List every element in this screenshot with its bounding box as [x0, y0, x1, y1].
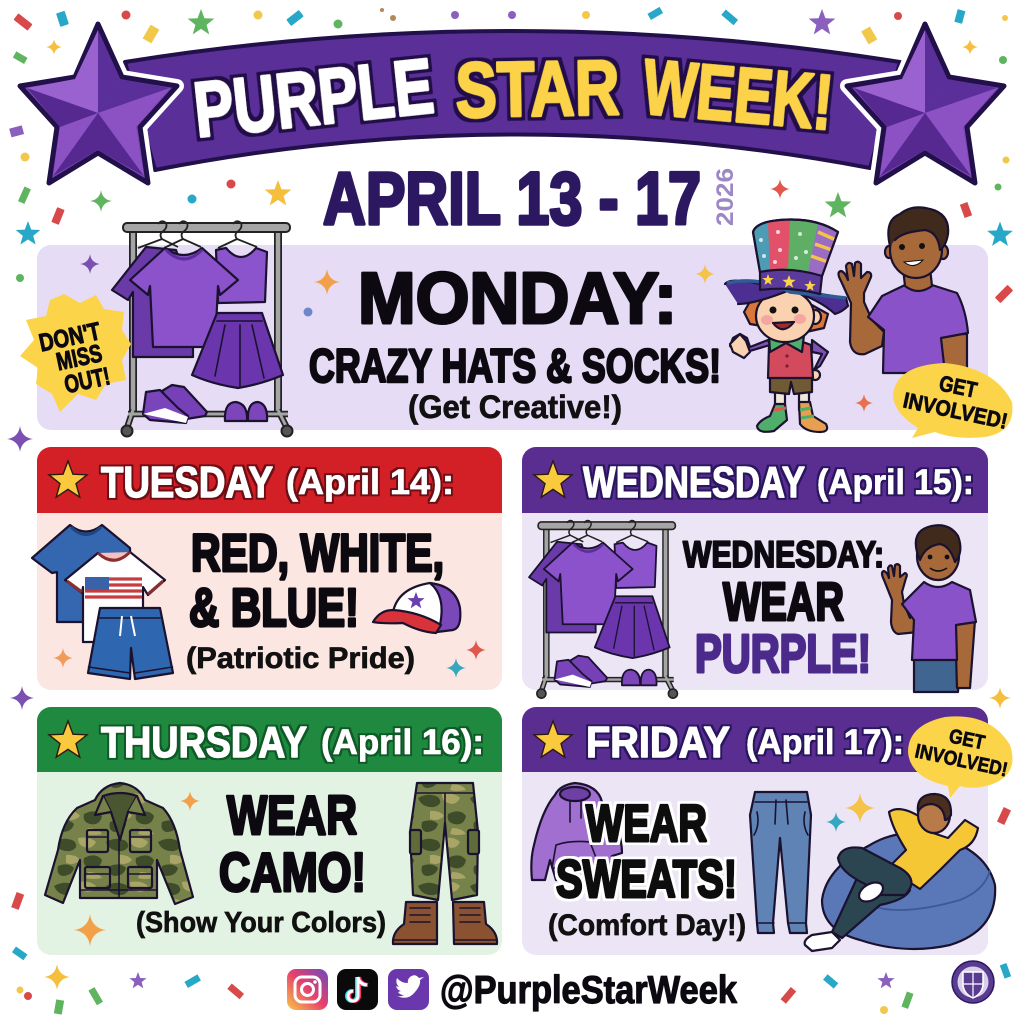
- illustration: man waving: [838, 207, 968, 373]
- panel: friday: [522, 707, 995, 955]
- school seal: [952, 961, 994, 1003]
- footer social row: [287, 969, 737, 1012]
- panel: tuesday: [32, 447, 502, 690]
- sparkles: [53, 640, 486, 678]
- illustration: sweatpants: [750, 792, 811, 933]
- illustration: blue t-shirt: [32, 525, 132, 622]
- monday note: (Get Creative!): [408, 389, 622, 425]
- monday heading: MONDAY:: [358, 259, 677, 339]
- sparkles: [74, 791, 200, 946]
- tuesday note: (Patriotic Pride): [186, 642, 415, 675]
- illustration: cap: [373, 583, 460, 633]
- wednesday theme: PURPLE!: [695, 624, 871, 684]
- tuesday heading: [101, 458, 454, 507]
- sparkles: [826, 793, 875, 832]
- date heading: APRIL 13 - 17: [323, 157, 701, 240]
- wednesday heading: (April 15):: [817, 463, 974, 502]
- panel: monday: [20, 207, 988, 436]
- illustration: hoodie: [531, 783, 622, 880]
- friday heading: [586, 718, 904, 767]
- thursday heading: [101, 718, 484, 767]
- clothes rack: [529, 521, 677, 698]
- bubble: get involved: [908, 716, 1012, 798]
- thursday theme: [219, 784, 366, 903]
- star icon: [49, 721, 87, 757]
- title text: PURPLE: [190, 41, 437, 154]
- panel: thursday: [37, 707, 502, 955]
- icon: tiktok: [337, 969, 378, 1010]
- star icon: [49, 461, 87, 497]
- friday theme: SWEATS!: [556, 850, 737, 909]
- illustration: blue shorts: [88, 608, 173, 679]
- tuesday heading: (April 14):: [286, 463, 454, 502]
- illustration: camo pants and boots: [393, 783, 497, 944]
- sparkles: [80, 254, 873, 412]
- thursday heading: THURSDAY: [101, 718, 307, 767]
- tuesday theme: & BLUE!: [189, 578, 359, 638]
- wednesday theme: WEAR: [723, 572, 844, 632]
- thursday theme: WEAR: [227, 784, 357, 846]
- tuesday theme: RED, WHITE,: [191, 524, 444, 583]
- wednesday theme: [683, 534, 884, 684]
- bubble: get involved: GET: [947, 725, 987, 754]
- panel: wednesday: [522, 447, 988, 698]
- illustration: kid in crazy hat: [725, 219, 848, 432]
- illustration: camo jacket: [45, 783, 193, 904]
- badge: don't miss out: DON'T: [37, 317, 103, 358]
- wednesday theme: WEDNESDAY:: [683, 534, 884, 575]
- friday heading: FRIDAY: [586, 718, 730, 767]
- tuesday theme: [189, 524, 444, 638]
- friday note: (Comfort Day!): [548, 909, 746, 942]
- friday theme: WEAR: [586, 795, 707, 853]
- friday heading: (April 17):: [746, 723, 904, 762]
- illustration: person on bean bag: [805, 794, 995, 951]
- year vertical: 2026: [712, 168, 739, 226]
- badge: don't miss out: OUT!: [62, 362, 113, 399]
- clothes rack: [112, 221, 292, 436]
- title banner: [20, 24, 1004, 183]
- thursday note: (Show Your Colors): [136, 907, 386, 939]
- monday theme: CRAZY HATS & SOCKS!: [309, 339, 721, 392]
- illustration: flag shirt: [65, 552, 165, 642]
- title text: WEEK!: [640, 42, 836, 146]
- title text: [190, 41, 836, 154]
- thursday heading: (April 16):: [321, 723, 484, 762]
- friday theme: [556, 795, 737, 909]
- wednesday heading: WEDNESDAY: [583, 458, 805, 507]
- bubble: get involved: INVOLVED!: [901, 387, 1010, 434]
- badge: don't miss out: [20, 294, 131, 412]
- bubble: get involved: [893, 363, 1012, 438]
- social handle: @PurpleStarWeek: [440, 969, 737, 1012]
- star icon: [534, 461, 572, 497]
- bubble: get involved: GET: [937, 370, 980, 403]
- icon: instagram: [287, 969, 328, 1010]
- bubble: get involved: INVOLVED!: [913, 740, 1009, 781]
- star left: [20, 24, 177, 183]
- star right: [847, 24, 1004, 183]
- tuesday heading: TUESDAY: [101, 458, 273, 507]
- title text: STAR: [455, 43, 620, 134]
- icon: twitter bird: [388, 969, 429, 1010]
- thursday theme: CAMO!: [219, 841, 366, 903]
- badge: don't miss out: MISS: [54, 339, 105, 376]
- illustration: man waving: [882, 525, 976, 692]
- star icon: [534, 721, 572, 757]
